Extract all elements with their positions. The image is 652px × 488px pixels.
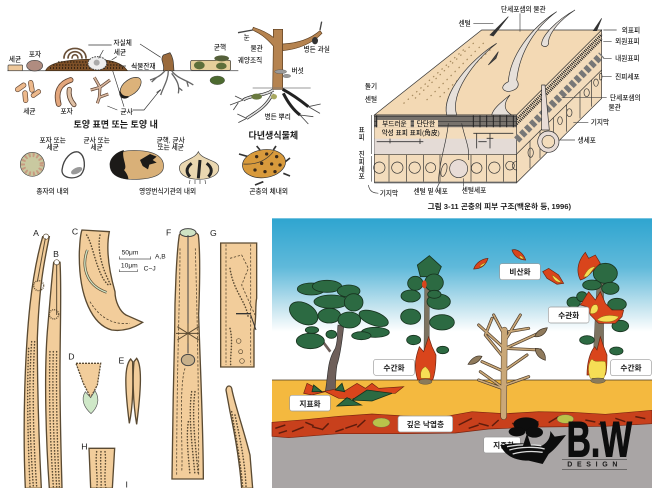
icon: seed: [20, 152, 44, 176]
labels: 눈: [244, 34, 250, 42]
front face layers: [374, 115, 517, 183]
scale bars: 10μm: [121, 262, 138, 269]
labels: 균핵: [214, 43, 226, 52]
labels: 포자: [29, 50, 41, 59]
labels: 균핵, 균사: [157, 135, 185, 144]
scale bars: A,B: [155, 254, 166, 261]
labels: 센털 밑 세포: [414, 186, 448, 195]
labels: 식물잔재: [131, 61, 156, 70]
figure letters: G: [210, 228, 217, 238]
logo: BW Design: [501, 411, 633, 470]
figure letters: E: [118, 355, 124, 365]
label: crown fire: 수관화: [558, 310, 579, 320]
labels: [359, 5, 641, 197]
figure letters: F: [166, 228, 171, 238]
labels: 진피세포: [615, 72, 640, 81]
seta shaft: [438, 123, 469, 182]
labels: 세균: [91, 143, 103, 152]
deep litter layer: [272, 410, 652, 438]
nematode tail I: [226, 386, 253, 488]
labels: 돌기: [365, 81, 377, 90]
trichogen cell: [450, 160, 468, 178]
labels: 생세포: [577, 136, 596, 145]
icon: seed section: [62, 152, 84, 178]
label: spotting fire: 비산화: [509, 267, 531, 277]
sky: [272, 218, 652, 380]
epidermal cells: [374, 155, 521, 182]
labels: 포자: [61, 106, 73, 115]
labels: 영양번식기관의 내외: [139, 187, 196, 196]
labels: 기지막: [380, 188, 398, 197]
nematode E spicules: [126, 358, 140, 424]
leader lines: [88, 44, 161, 110]
labels: 진: [359, 150, 365, 159]
figure letters: [33, 226, 217, 488]
figure letters: D: [68, 351, 74, 361]
labels: 또는 세균: [157, 143, 184, 152]
labels: 센털: [459, 18, 471, 27]
labels: 내원표피: [615, 53, 640, 62]
labels: 곤충의 체내외: [249, 187, 288, 196]
label: trunk fire left: [374, 359, 414, 375]
figure letters: C: [72, 226, 78, 236]
labels: 균사 또는: [83, 135, 110, 144]
ground surface: [272, 380, 652, 430]
labels: 물관: [251, 43, 263, 52]
labels: 악성 표피 표피(角皮): [382, 128, 440, 137]
labels: 병든 과실: [303, 45, 330, 54]
label: ground fire: 지중화: [493, 440, 514, 450]
icon: diseased tuber: [110, 150, 164, 179]
labels: 외원표피: [615, 37, 640, 46]
labels: 센털: [365, 94, 377, 103]
nematode H segment: [89, 448, 115, 488]
nematode D tail tip: [76, 363, 101, 414]
tree: windswept pine with surface fire: [285, 280, 390, 392]
labels: 세균: [23, 106, 35, 115]
labels: 세: [359, 164, 365, 173]
scale bars: C~J: [144, 265, 156, 272]
seta socket cell: [440, 163, 448, 177]
icon: hyphae: [91, 77, 110, 103]
labels: 버섯: [292, 66, 304, 75]
label: surface fire: 지표화: [299, 398, 321, 408]
label: crown fire: [548, 307, 589, 323]
labels: 세균: [9, 55, 21, 64]
label: spotting fire: [500, 264, 540, 280]
logo tagline: DESIGN: [567, 462, 622, 469]
labels: 종자의 내외: [36, 187, 69, 196]
panel: plant pathogen overwintering sources: [7, 22, 330, 196]
panel: insect skin structure: [359, 5, 641, 211]
surface fire: [304, 383, 404, 406]
soil surface line: [7, 69, 238, 72]
icon: bacteria cells: [14, 80, 42, 103]
label: deep litter: [398, 416, 453, 432]
labels: 부드러운: [382, 119, 407, 128]
top face: [374, 30, 602, 115]
label: trunk fire left: 수간화: [383, 362, 405, 372]
bristle field dots: [400, 43, 490, 107]
label: trunk fire right: [611, 360, 651, 376]
icon: plant debris mound: [46, 48, 127, 71]
tree: pine with crown fire: [567, 252, 629, 383]
heading: perennial plant: 다년생식물체: [249, 130, 298, 141]
icon: spore on soil: [27, 60, 43, 71]
subsoil: [272, 422, 652, 488]
figure letters: A: [33, 228, 39, 238]
labels: 기지막: [591, 118, 609, 127]
labels: 표: [359, 126, 365, 134]
figure caption: 그림 3-11 곤충의 피부 구조(백운하 등, 1996): [428, 201, 572, 211]
panel: nematode morphology: [24, 226, 257, 488]
icon: ladybird beetle: [239, 146, 290, 185]
labels: 궤양조직: [238, 55, 262, 64]
leader lines: [368, 13, 617, 193]
icon: spores: [58, 80, 74, 105]
nematode A: [24, 234, 49, 488]
flying embers: [474, 250, 564, 284]
panel: forest fire types: [272, 218, 652, 488]
labels: 물관: [609, 102, 621, 111]
icon: stump with roots: [150, 53, 193, 95]
nematode F: [172, 229, 203, 479]
figure letters: B: [53, 249, 59, 259]
labels: 단세포샘의: [610, 93, 641, 102]
icon: sclerotia on log: [191, 55, 231, 85]
labels: 세균: [114, 48, 126, 57]
right face: [517, 30, 602, 183]
labels: 균사: [121, 107, 133, 116]
label: trunk fire right: 수간화: [620, 363, 642, 373]
label: deep litter: 깊은 낙엽층: [407, 419, 444, 429]
labels: 포자 또는: [39, 135, 66, 144]
nematode C tail: [79, 230, 143, 330]
labels: 외표피: [622, 26, 640, 35]
labels: 자실체: [113, 38, 132, 47]
hairs: [446, 10, 602, 115]
labels: 단세포샘의 물관: [501, 5, 546, 14]
labels: 피: [359, 157, 365, 166]
icon: bulb: [179, 152, 219, 184]
labels: 세균: [47, 143, 59, 152]
nematode G segment: [221, 243, 257, 367]
label: surface fire: [290, 395, 330, 411]
labels: 센털세포: [462, 186, 486, 195]
sensory cell: [538, 85, 559, 152]
label: ground fire: [484, 437, 520, 453]
icon: bacteria on soil: [8, 65, 23, 71]
labels: 병든 뿌리: [264, 112, 291, 121]
labels: [9, 34, 330, 196]
tree: bare tree: [479, 315, 542, 417]
scale bars: [119, 249, 166, 272]
labels: 포: [359, 173, 365, 181]
labels: 피: [359, 133, 365, 142]
dead leaves: [468, 328, 547, 364]
logo whale and tree: [501, 417, 566, 464]
nematode B: [46, 260, 62, 488]
icon: tuber in soil: [120, 77, 141, 98]
tree: pine with trunk fire: [401, 256, 454, 384]
scale bars: 50μm: [122, 249, 139, 256]
figure letters: H: [81, 441, 87, 451]
labels: 단단한: [417, 119, 435, 128]
heading: soil: 토양 표면 또는 토양 내: [73, 119, 158, 130]
icon: diseased tree: [230, 22, 322, 124]
